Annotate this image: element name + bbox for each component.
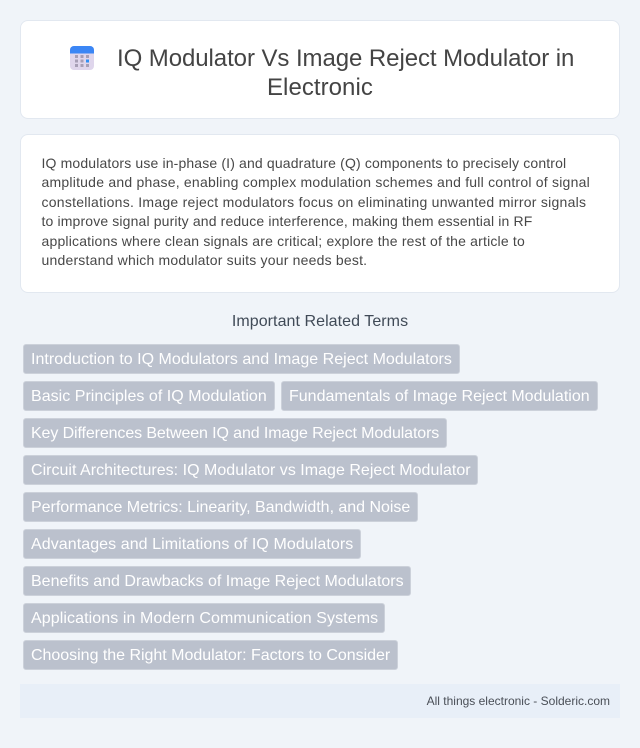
panel: introduction xyxy=(20,134,620,293)
tag: basic principles xyxy=(23,381,275,411)
tag: key differences: Key Differences Between IQ and Image Reject Modulators xyxy=(31,425,439,442)
text block: introduction paragraph: constellations. Image reject modulators focus on eliminating unwanted mirror signals xyxy=(42,194,586,210)
tag: circuit architectures xyxy=(23,455,478,485)
title xyxy=(117,45,574,101)
tag: introduction: Introduction to IQ Modulators and Image Reject Modulators xyxy=(31,351,452,368)
icon: calendar grid xyxy=(70,46,94,70)
tag: performance metrics: Performance Metrics: Linearity, Bandwidth, and Noise xyxy=(31,499,410,516)
text block: introduction paragraph xyxy=(42,155,590,268)
title: IQ Modulator Vs Image Reject Modulator in xyxy=(117,45,574,72)
tag: applications xyxy=(23,603,385,633)
panel: title header xyxy=(20,20,620,119)
tag: introduction xyxy=(23,344,460,374)
tag: advantages xyxy=(23,529,361,559)
title: Electronic xyxy=(267,74,373,101)
tag: benefits: Benefits and Drawbacks of Image Reject Modulators xyxy=(31,573,404,590)
tag: benefits xyxy=(23,566,411,596)
tag: choosing xyxy=(23,640,398,670)
text block: introduction paragraph: to improve signal purity and reduce interference, making them essential in RF xyxy=(42,213,532,229)
tag: choosing: Choosing the Right Modulator: Factors to Consider xyxy=(31,647,390,664)
tag: basic principles: Basic Principles of IQ Modulation xyxy=(31,388,267,405)
tag list: related terms xyxy=(23,344,598,670)
tag: key differences xyxy=(23,418,447,448)
footer xyxy=(20,684,620,718)
text block: introduction paragraph: amplitude and phase, enabling complex modulation schemes and full control of signal xyxy=(42,174,590,190)
footer credit: All things electronic - Solderic.com xyxy=(427,694,610,708)
text block: introduction paragraph: IQ modulators use in-phase (I) and quadrature (Q) components to precisely control xyxy=(42,155,566,171)
tag: advantages: Advantages and Limitations of IQ Modulators xyxy=(31,536,353,553)
heading: important related terms: Important Related Terms xyxy=(232,313,408,330)
tag: fundamentals: Fundamentals of Image Reject Modulation xyxy=(289,388,590,405)
tag: performance metrics xyxy=(23,492,418,522)
tag: fundamentals xyxy=(281,381,598,411)
text block: introduction paragraph: applications where clean signals are critical; explore the rest of the article to xyxy=(42,233,525,249)
tag: applications: Applications in Modern Communication Systems xyxy=(31,610,378,627)
text block: introduction paragraph: understand which modulator suits your needs best. xyxy=(42,252,367,268)
tag: circuit architectures: Circuit Architectures: IQ Modulator vs Image Reject Modulator xyxy=(31,462,471,479)
